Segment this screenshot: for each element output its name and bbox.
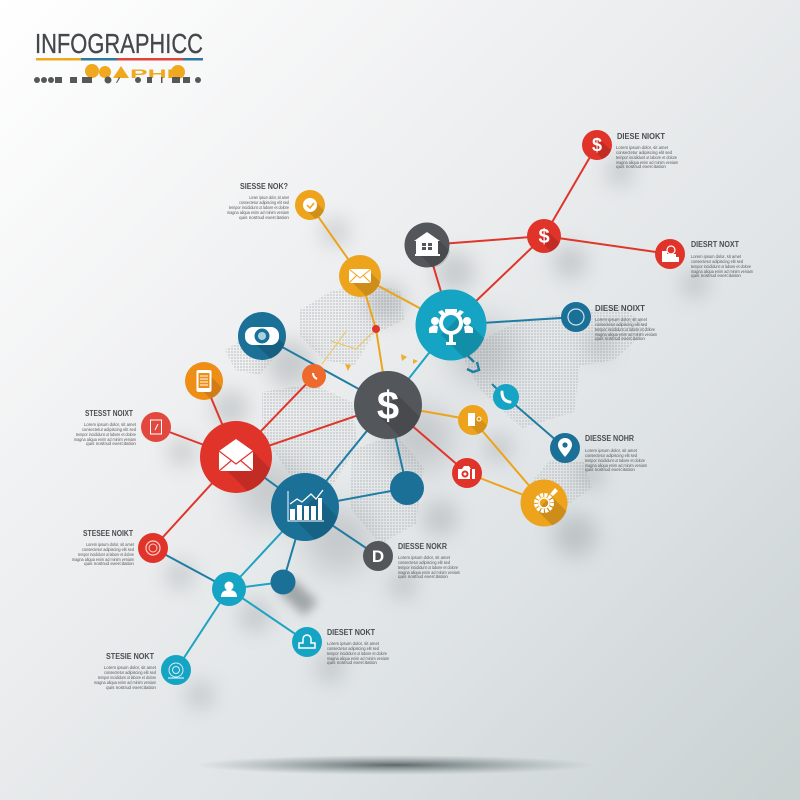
label: red ring: tempor incididunt ut labore et dolore <box>78 552 134 557</box>
label: grey D: consectetur adipiscing elit sed <box>398 560 450 565</box>
title: INFOGRAPHICC <box>35 28 203 59</box>
floor shadow <box>195 755 595 775</box>
icon: grey house node <box>404 222 450 268</box>
icon: central dark dollar node <box>354 371 422 439</box>
icon: teal phone node <box>493 384 519 410</box>
label: orange badge: SIESSE NOK? <box>240 182 288 191</box>
label: orange badge: Lorem ipsum dolor, sit amet <box>249 195 290 200</box>
label: blue ring: quis nostrud exercitation <box>595 336 645 341</box>
label: red tablet: tempor incididunt ut labore et dolore <box>76 432 136 437</box>
label: red tablet: Lorem ipsum dolor, sit amet <box>84 422 137 427</box>
label: blue ring: tempor incididunt ut labore et dolore <box>595 327 655 332</box>
label: grey D: Lorem ipsum dolor, sit amet <box>398 555 451 560</box>
label: grey D: quis nostrud exercitation <box>398 574 448 579</box>
label: blue ring: consectetur adipiscing elit sed <box>595 322 647 327</box>
icon: red camera node <box>452 458 482 488</box>
label: teal profile: DIESET NOKT <box>327 628 375 637</box>
long cast shadow of dark blue node <box>278 578 318 616</box>
label: red tablet <box>74 409 137 446</box>
soft node shadows <box>166 158 709 709</box>
label: blue pin: Lorem ipsum dolor, sit amet <box>585 448 638 453</box>
icon: orange badge node <box>295 190 325 220</box>
icon: blue chart node <box>271 473 339 541</box>
icon: top red dollar node: $ <box>592 135 602 155</box>
label: orange badge: quis nostrud exercitation <box>239 215 289 220</box>
label: red ticket: magna aliqua enim ad minim veniam <box>691 269 753 274</box>
label: teal target: magna aliqua enim ad minim veniam <box>94 680 156 685</box>
icon: dark blue solid node <box>270 570 296 594</box>
label: teal profile: magna aliqua enim ad minim veniam <box>327 656 389 661</box>
icon: orange gear node <box>520 480 568 526</box>
label: grey D: DIESSE NOKR <box>398 542 447 551</box>
label: red ring: magna aliqua enim ad minim veniam <box>72 557 134 562</box>
label: teal profile: quis nostrud exercitation <box>327 660 377 665</box>
label: orange badge <box>227 182 290 220</box>
label: red ring: quis nostrud exercitation <box>84 561 134 566</box>
label: blue ring: magna aliqua enim ad minim veniam <box>595 332 657 337</box>
label: blue pin <box>585 434 647 472</box>
icon: grey letter D node: D <box>372 547 384 566</box>
icon: grey letter D node <box>363 541 393 571</box>
red connector dot <box>372 325 380 333</box>
icon: orange tablet node <box>185 362 223 400</box>
icon: teal profile node <box>292 627 322 657</box>
icon: red dollar node: $ <box>538 226 550 248</box>
label: teal profile: Lorem ipsum dolor, sit amet <box>327 641 380 646</box>
icon: blue ring node <box>561 302 591 332</box>
label: top red dollar: consectetur adipiscing elit sed <box>616 150 672 155</box>
label: grey D: magna aliqua enim ad minim veniam <box>398 570 460 575</box>
label: red ring: STESEE NOIKT <box>83 529 133 538</box>
label: red ring: consectetur adipiscing elit sed <box>82 547 134 552</box>
label: red tablet: quis nostrud exercitation <box>86 441 136 446</box>
icon: red ring node <box>138 533 168 563</box>
connector lines: blue <box>153 317 576 589</box>
title logo <box>34 28 203 84</box>
icon: orange envelope node <box>339 255 381 297</box>
label: teal profile: consectetur adipiscing elit sed <box>327 646 379 651</box>
label: top red dollar <box>616 132 678 169</box>
connector lines: orange <box>310 205 544 503</box>
label: red ticket: DIESRT NOXT <box>691 240 739 249</box>
label: blue pin: tempor incididunt ut labore et dolore <box>585 458 645 463</box>
label: teal target: consectetur adipiscing elit sed <box>104 670 156 675</box>
label: top red dollar: quis nostrud exercitation <box>616 164 666 169</box>
label: blue pin: magna aliqua enim ad minim veniam <box>585 463 647 468</box>
icon: blue pin node <box>550 433 580 463</box>
label: red tablet: STESST NOIXT <box>85 409 133 418</box>
icon: orange phone node <box>302 364 326 388</box>
connector lines: red <box>153 145 670 548</box>
icon: orange door node <box>458 405 488 435</box>
icon: blue eye node <box>238 312 286 360</box>
label: blue ring <box>595 304 657 341</box>
subtitle row of grey glyphs <box>34 76 201 84</box>
label: red tablet: consectetur adipiscing elit sed <box>82 427 136 432</box>
label: grey D: tempor incididunt ut labore et dolore <box>398 565 458 570</box>
label: teal target: quis nostrud exercitation <box>106 685 156 690</box>
label: teal target: STESIE NOKT <box>106 652 154 661</box>
label: red ring <box>72 529 135 566</box>
icon: teal team gear node <box>416 290 489 363</box>
label: orange badge: magna aliqua enim ad minim veniam <box>227 210 289 215</box>
label: red ticket: consectetur adipiscing elit sed <box>691 259 743 264</box>
label: teal target: Lorem ipsum dolor, sit amet <box>104 665 157 670</box>
label: blue pin: DIESSE NOHR <box>585 434 634 443</box>
label: teal target: tempor incididunt ut labore et dolore <box>98 675 156 680</box>
world map <box>225 284 650 544</box>
label: top red dollar: Lorem ipsum dolor, sit amet <box>616 145 669 150</box>
label: blue ring: DIESE NOIXT <box>595 304 645 313</box>
label: top red dollar: DIESE NIOKT <box>617 132 665 141</box>
icon: red tablet node <box>141 412 171 442</box>
label: red ticket: tempor incididunt ut labore et dolore <box>691 264 751 269</box>
label: teal profile: tempor incididunt ut labore et dolore <box>327 651 387 656</box>
label: teal target <box>94 652 157 690</box>
label: red tablet: magna aliqua enim ad minim veniam <box>74 437 136 442</box>
label: blue pin: consectetur adipiscing elit sed <box>585 453 637 458</box>
icon: central dark dollar node: $ <box>377 384 399 428</box>
label: red ticket <box>691 240 753 278</box>
label: orange badge: tempor incididunt ut labore et dolore <box>229 205 289 210</box>
icon: teal user node <box>212 572 246 606</box>
icon: top red dollar node <box>582 130 612 160</box>
icon: red envelope node <box>200 421 272 493</box>
label: red ticket: quis nostrud exercitation <box>691 273 741 278</box>
label: grey D <box>398 542 460 579</box>
icon: red dollar node <box>527 219 561 253</box>
label: blue ring: Lorem ipsum dolor, sit amet <box>595 317 648 322</box>
icon: teal target node <box>161 655 191 685</box>
icon: blue solid node <box>390 471 424 505</box>
label: red ring: Lorem ipsum dolor, sit amet <box>86 542 135 547</box>
label: red ticket: Lorem ipsum dolor, sit amet <box>691 254 742 259</box>
subtitle orange: PHI <box>130 67 174 81</box>
connector lines: teal <box>176 325 451 670</box>
subtitle orange <box>85 64 185 81</box>
label: orange badge: consectetur adipiscing elit sed <box>239 200 289 205</box>
label: top red dollar: magna aliqua enim ad minim veniam <box>616 160 678 165</box>
map accents <box>345 354 418 371</box>
label: top red dollar: tempor incididunt ut labore et dolore <box>616 155 677 160</box>
icon: red ticket node <box>655 239 685 269</box>
label: teal profile <box>327 628 389 665</box>
label: blue pin: quis nostrud exercitation <box>585 467 635 472</box>
